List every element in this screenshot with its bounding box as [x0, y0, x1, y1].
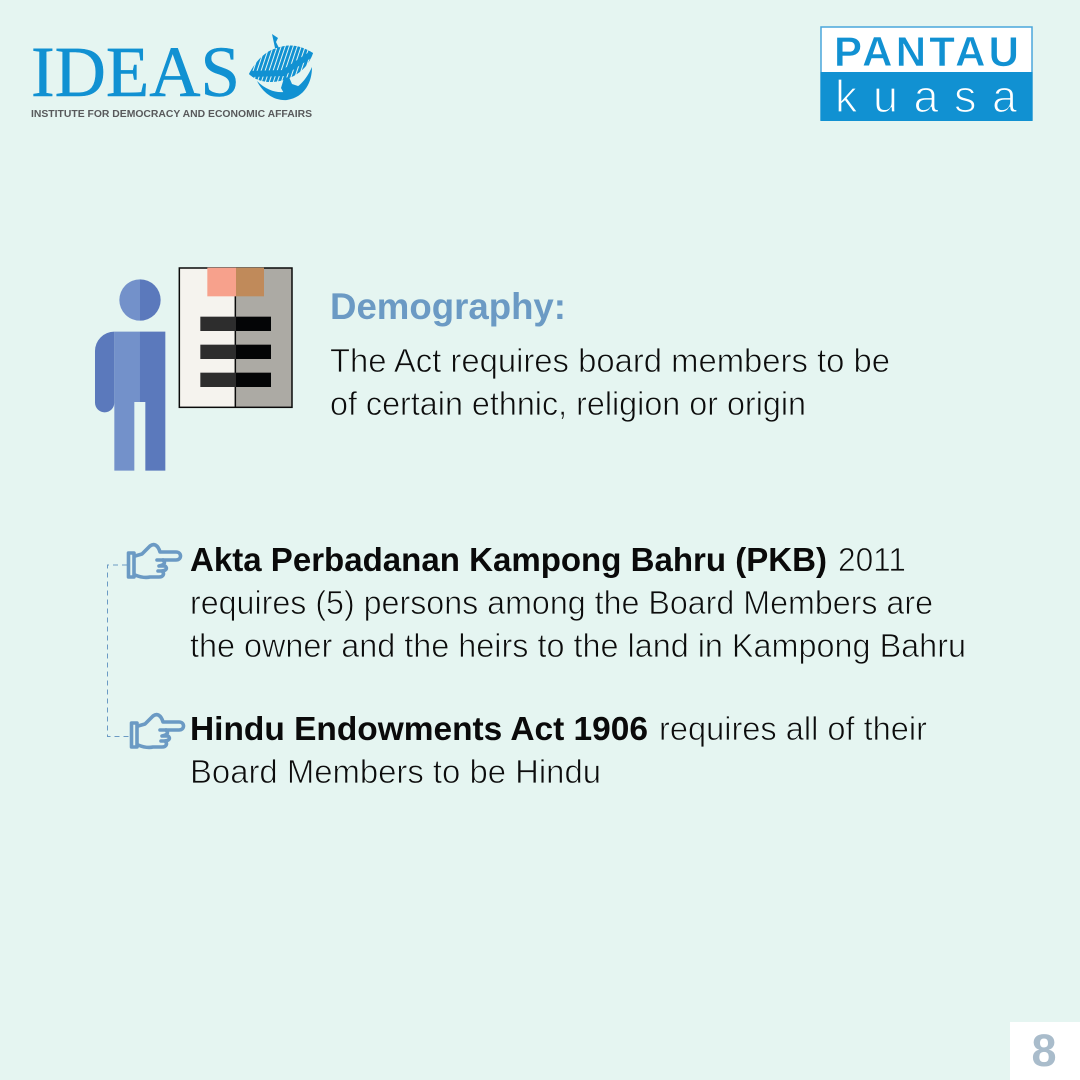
icon: scribbled fish and bird mark — [249, 34, 313, 100]
bullet 2 text: Hindu Endowments Act 1906 — [190, 710, 648, 747]
document — [179, 268, 292, 407]
heading: Demography: Demography: — [330, 286, 566, 327]
icon: pointing hand 2 — [132, 715, 184, 747]
page number: 8 — [1031, 1025, 1057, 1076]
bullet 2 text: Board Members to be Hindu — [190, 753, 601, 790]
logo: Pantau Kuasa — [820, 27, 1032, 122]
bullet 1 text: Akta Perbadanan Kampong Bahru (PKB) — [190, 541, 827, 578]
intro text — [330, 342, 890, 422]
presenter figure — [95, 279, 165, 471]
page number — [1010, 1022, 1080, 1080]
intro text: The Act requires board members to be — [330, 342, 890, 379]
logo wordmark: IDEAS — [31, 32, 240, 112]
bullet 2 text — [190, 710, 927, 790]
bullet 1 text: requires (5) persons among the Board Members are — [190, 584, 933, 621]
dashed connector — [108, 565, 129, 736]
logo upper panel — [821, 27, 1032, 120]
bullet 1 text — [190, 541, 966, 664]
bullet 1 text: the owner and the heirs to the land in Kampong Bahru — [190, 627, 966, 664]
logo tagline: INSTITUTE FOR DEMOCRACY AND ECONOMIC AFFAIRS — [31, 108, 312, 120]
intro text: of certain ethnic, religion or origin — [330, 385, 806, 422]
bullet 2 text: requires all of their — [659, 710, 927, 747]
logo: IDEAS — [31, 32, 316, 120]
logo word kuasa: kuasa — [835, 71, 1018, 122]
icon: presenter with document — [95, 268, 292, 471]
icon: pointing hand 1 — [128, 545, 180, 577]
logo word PANTAU: PANTAU — [834, 28, 1019, 75]
logo lower band — [820, 72, 1032, 121]
bullet 1 text: 2011 — [838, 541, 906, 578]
